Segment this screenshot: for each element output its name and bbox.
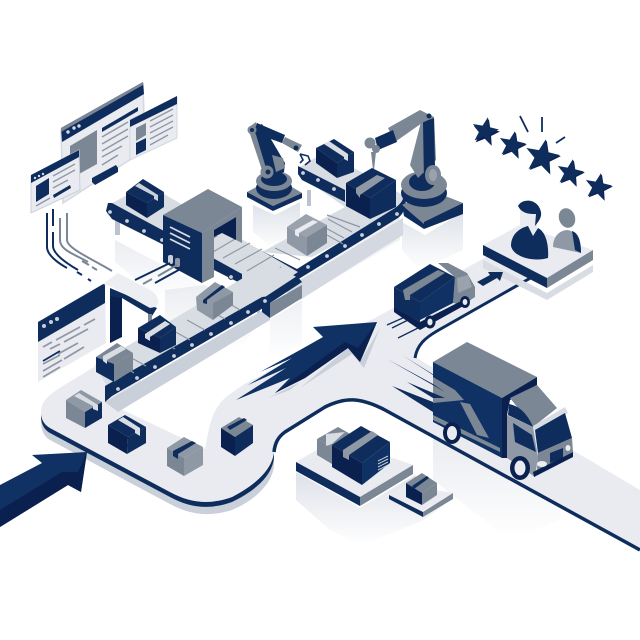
road edge lines	[274, 276, 640, 550]
van speed lines	[387, 317, 420, 338]
browser window right	[130, 96, 177, 160]
floor box 4 navy	[221, 417, 253, 456]
browser window left	[31, 150, 80, 213]
delivery truck	[387, 342, 573, 480]
large box on belt	[346, 168, 396, 219]
customer figures	[511, 201, 581, 260]
box top on belt D	[316, 139, 354, 178]
belt B stripes	[116, 298, 240, 373]
overhead pick arm	[103, 273, 158, 343]
rating sparkle lines	[520, 116, 565, 143]
delivery van	[387, 263, 475, 338]
floor box 2 navy	[108, 415, 146, 454]
end box on belt B	[96, 343, 133, 382]
arm upper	[410, 117, 436, 178]
navy box front	[332, 426, 390, 485]
belt A rollers	[108, 210, 233, 279]
floor box 1 gray	[66, 390, 102, 428]
belt C front side	[262, 191, 406, 280]
belt C shade	[262, 218, 403, 300]
conveyor A: through gantry	[106, 184, 298, 296]
dashed data cables from browser windows	[47, 209, 112, 281]
truck wheels	[443, 422, 461, 444]
gripper	[300, 154, 310, 165]
gantry connectors	[168, 255, 180, 267]
gray box on belt B	[196, 282, 233, 320]
small pallet with box	[389, 473, 453, 517]
browser window large	[61, 82, 145, 203]
conveyor D and C: upper belt with U-turn	[262, 152, 406, 300]
robot arm left	[247, 122, 310, 211]
person gray	[553, 206, 581, 253]
forearm	[388, 110, 434, 142]
gray box behind	[317, 427, 352, 464]
small direction arrow	[477, 272, 503, 286]
cables from gantry to arm	[135, 263, 184, 284]
browser window lower left	[38, 283, 106, 382]
floor reflections	[115, 202, 560, 545]
speed spikes	[387, 355, 455, 412]
belt rollers	[301, 171, 399, 269]
person navy	[511, 201, 548, 260]
conveyor B: long lower belt	[95, 262, 302, 412]
customer platform	[483, 225, 593, 300]
large pallet with boxes	[296, 426, 413, 506]
gray box on belt C	[287, 214, 327, 256]
belt B rollers	[116, 299, 267, 391]
belt surface	[262, 152, 403, 257]
stars rating	[470, 115, 615, 202]
belt leg	[307, 190, 311, 206]
robot arm right	[364, 110, 463, 229]
road floor edge and shadow	[41, 412, 274, 514]
van wheels	[424, 316, 436, 328]
arm segments	[248, 122, 270, 170]
belt A stripes	[204, 236, 281, 279]
gantry scanner	[163, 189, 242, 283]
gantry vents	[170, 227, 190, 249]
belt stripes	[275, 215, 360, 260]
tool head	[371, 152, 376, 170]
box on conveyor A	[126, 179, 164, 218]
box under pick arm	[138, 315, 176, 353]
road floor surface	[41, 255, 640, 550]
belt D front side	[298, 166, 345, 202]
floor box 3 gray	[167, 437, 203, 476]
arrow: inbound bottom left	[0, 452, 87, 527]
arrow: centre with speed streaks	[236, 322, 380, 400]
